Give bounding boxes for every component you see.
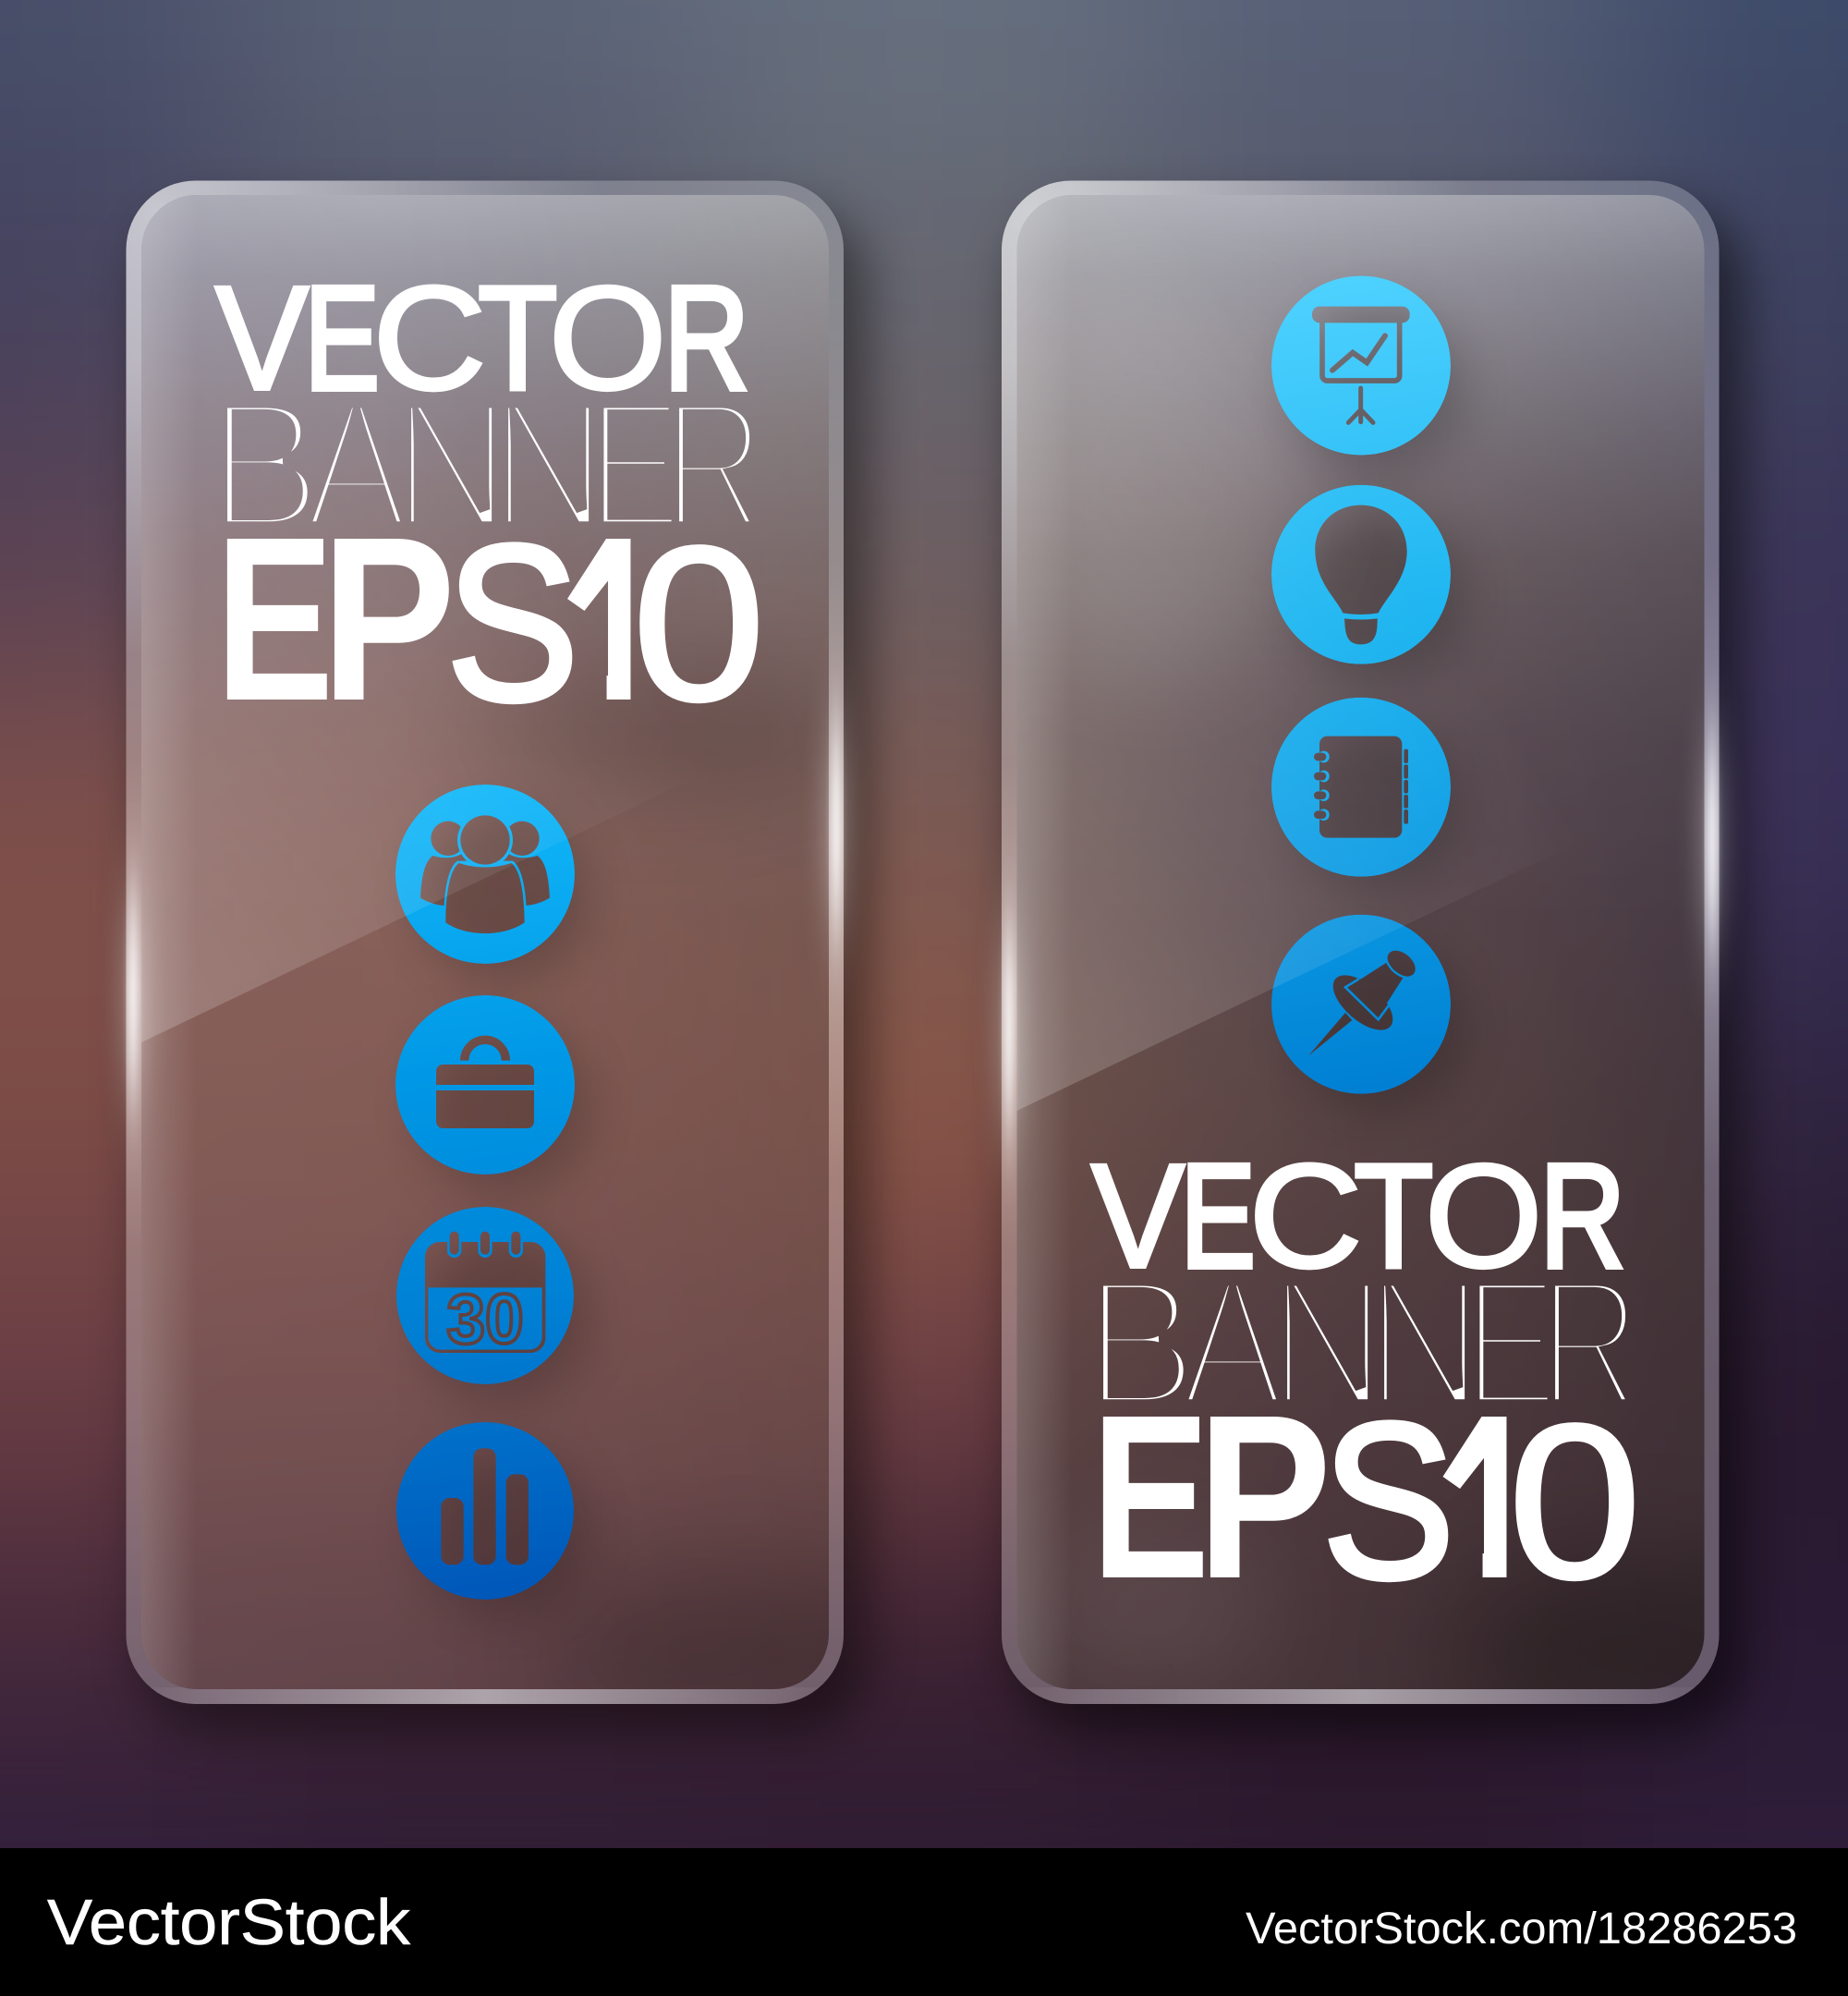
heading: BANNER: E	[588, 362, 683, 566]
heading: VECTOR: V	[215, 255, 309, 420]
glass bevel frame	[994, 176, 1727, 1710]
heading: BANNER: E	[1464, 1240, 1559, 1444]
heading: BANNER: R	[1538, 1240, 1641, 1444]
EPS10 digit 1 flag	[567, 539, 629, 611]
heading: VECTOR: O	[1425, 1133, 1543, 1298]
heading: VECTOR	[1088, 1142, 1643, 1290]
heading: VECTOR: E	[304, 255, 379, 420]
panel shadow	[1015, 208, 1745, 1733]
heading: VECTOR: C	[1248, 1133, 1362, 1298]
heading: BANNER: R	[663, 362, 765, 566]
heading: BANNER: A	[1180, 1240, 1283, 1444]
heading: BANNER	[1103, 1251, 1658, 1434]
icon: bar chart	[396, 1422, 574, 1600]
heading: BANNER: N	[490, 362, 608, 566]
heading: EPS10: P	[1197, 1366, 1331, 1627]
heading: EPS10: E	[1090, 1366, 1210, 1627]
heading: VECTOR: C	[372, 255, 486, 420]
footer brand text: VectorStock	[47, 1886, 411, 1958]
heading: BANNER: A	[304, 362, 407, 566]
glass bevel frame	[118, 176, 851, 1710]
heading: VECTOR: E	[1180, 1133, 1255, 1298]
circle shadows	[1295, 303, 1465, 1112]
icon: notebook	[1271, 698, 1451, 877]
heading: BANNER: N	[1366, 1240, 1484, 1444]
glass surface	[1005, 195, 1837, 1756]
footer url text: VectorStock.com/18286253	[1246, 1905, 1797, 1953]
heading: EPS10: 0	[1508, 1379, 1641, 1625]
heading: EPS10	[1103, 1380, 1658, 1613]
panel: left glass banner	[112, 181, 893, 1743]
heading: VECTOR	[213, 255, 749, 420]
heading: EPS10: 1	[569, 488, 663, 749]
icon: calendar	[396, 1207, 574, 1384]
heading: EPS10	[214, 488, 765, 749]
heading: BANNER: B	[1083, 1240, 1198, 1444]
heading: VECTOR: R	[663, 255, 749, 420]
icon: push pin	[1271, 915, 1451, 1094]
heading: VECTOR: O	[549, 255, 667, 420]
heading: EPS10: 0	[632, 501, 765, 747]
panel shadow	[139, 208, 869, 1733]
circle shadows	[419, 811, 589, 1618]
heading: VECTOR: R	[1539, 1133, 1625, 1298]
icon: briefcase	[395, 995, 575, 1174]
glass surface	[141, 195, 829, 1689]
glass sheen	[141, 195, 702, 1042]
heading: BANNER: N	[1268, 1240, 1387, 1444]
panel: right glass banner	[988, 181, 1767, 1744]
icon: people	[395, 785, 575, 964]
heading: VECTOR: T	[478, 255, 557, 420]
heading: BANNER: B	[207, 362, 322, 566]
heading: EPS10: S	[1322, 1376, 1455, 1625]
heading: BANNER	[207, 362, 765, 566]
heading: VECTOR: T	[1354, 1133, 1433, 1298]
glass sheen	[1016, 195, 1578, 1111]
icon: presentation board	[1271, 275, 1451, 455]
heading: BANNER: N	[392, 362, 511, 566]
heading: EPS10: S	[446, 498, 579, 747]
icon: light bulb	[1271, 485, 1451, 664]
heading: EPS10: 1	[1445, 1366, 1538, 1627]
heading: EPS10: P	[321, 488, 456, 749]
EPS10 digit 1 flag	[1443, 1417, 1504, 1489]
heading: VECTOR: V	[1091, 1133, 1185, 1298]
heading: EPS10: E	[214, 488, 334, 749]
